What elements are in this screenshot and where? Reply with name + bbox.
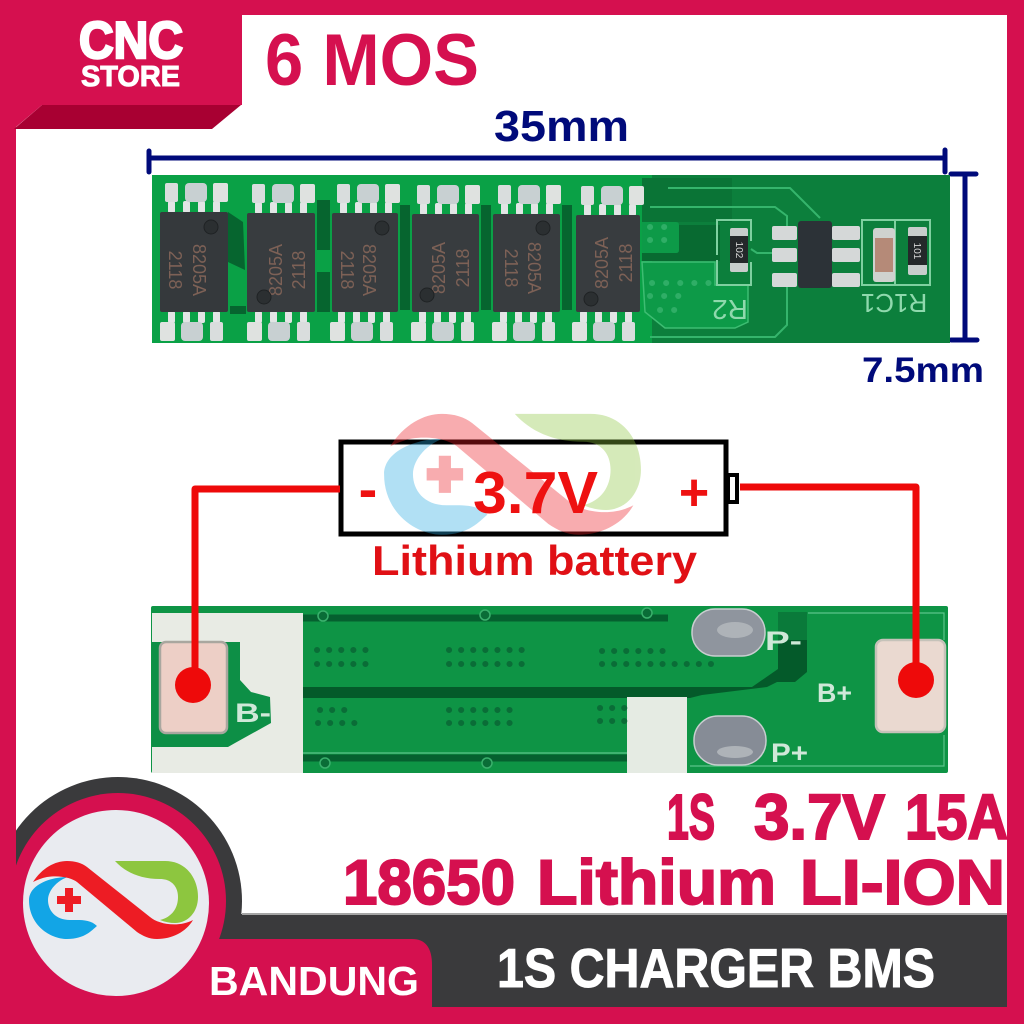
logo panel: CNC Store xyxy=(14,12,242,129)
bottom PCB photo xyxy=(151,606,948,773)
battery voltage: 3.7V xyxy=(473,460,598,526)
dark channels xyxy=(303,640,807,698)
label: B-: B- xyxy=(235,698,271,728)
logo text: CNC: CNC xyxy=(79,12,183,70)
via rows xyxy=(650,227,716,310)
dimension arrow: height xyxy=(951,174,977,340)
spec text: 18650 Lithium LI-ION: LI-ION xyxy=(800,848,1005,918)
dimension label: 35mm: 35mm xyxy=(494,102,629,151)
silkscreen label: R2: R2 xyxy=(712,294,748,325)
chip markings: 2118 xyxy=(616,244,636,282)
spec text: 1S 3.7V 15A: 3.7V xyxy=(754,781,885,853)
white silkscreen area left xyxy=(152,613,303,773)
wire: positive xyxy=(740,487,934,698)
chip markings: 8205A xyxy=(359,244,379,296)
battery label: Lithium battery xyxy=(372,537,698,584)
white patch xyxy=(627,697,687,773)
logo circle xyxy=(23,810,209,996)
battery terminal and text xyxy=(359,457,737,526)
traces xyxy=(650,188,820,337)
logo mark xyxy=(29,861,198,939)
heading: 6 MOS: 6 MOS xyxy=(265,20,479,101)
chip markings: 8205A xyxy=(189,244,209,296)
title: 1S Charger BMS: 1S CHARGER BMS xyxy=(497,937,935,999)
solder pad: P+ xyxy=(694,716,766,765)
dimension label: 7.5mm: 7.5mm xyxy=(862,351,984,390)
pad: B+ xyxy=(876,640,945,732)
spec text: 18650 Lithium LI-ION: 18650 xyxy=(343,848,515,918)
battery outline xyxy=(341,442,726,534)
resistor: 102: 102 xyxy=(733,242,744,259)
bottom bar xyxy=(220,913,1007,1007)
pad: B- xyxy=(160,642,227,733)
pin-one dots xyxy=(204,220,598,306)
battery plus sign: + xyxy=(679,464,709,522)
chip markings: 8205A xyxy=(592,237,612,289)
label: P-: P- xyxy=(765,626,802,656)
wire: negative xyxy=(175,489,340,703)
watermark logo xyxy=(384,414,641,535)
MOSFET chips xyxy=(160,183,644,341)
dark gaps between chips xyxy=(228,178,732,314)
dimension arrow: width xyxy=(149,150,945,172)
edge highlights xyxy=(303,613,944,766)
solder pad: P- xyxy=(692,609,765,656)
chip markings: 2118 xyxy=(289,251,309,289)
silkscreen boxes xyxy=(717,220,930,285)
chip markings: 8205A xyxy=(266,244,286,296)
spec text: 1S 3.7V 15A xyxy=(667,781,1008,853)
silkscreen label: R1C1: R1C1 xyxy=(861,288,927,318)
top PCB photo xyxy=(152,175,950,343)
chip markings xyxy=(165,237,636,296)
logo text: STORE: STORE xyxy=(81,61,180,93)
label: B+: B+ xyxy=(817,678,852,708)
capacitor xyxy=(873,228,895,282)
bright copper area xyxy=(642,262,748,328)
mounting vias xyxy=(318,608,652,768)
spec text: 18650 Lithium LI-ION xyxy=(343,848,1005,918)
chip markings: 8205A xyxy=(429,242,449,294)
chip markings: 2118 xyxy=(165,251,185,289)
label: P+: P+ xyxy=(771,738,808,768)
control IC xyxy=(772,221,860,288)
resistor: 101 xyxy=(908,227,927,275)
label: Bandung: BANDUNG xyxy=(209,958,419,1004)
spec text: 1S 3.7V 15A: 15A xyxy=(905,781,1008,853)
chip markings: 2118 xyxy=(501,249,521,287)
resistor: 102 xyxy=(730,228,748,272)
spec text: 18650 Lithium LI-ION: Lithium xyxy=(537,848,776,918)
badge: round logo and Bandung tab xyxy=(0,770,1024,1024)
resistor: 101: 101 xyxy=(911,243,922,260)
chip markings: 2118 xyxy=(453,249,473,287)
battery minus sign: - xyxy=(359,457,377,520)
chip markings: 2118 xyxy=(337,251,357,289)
spec text: 1S 3.7V 15A: 1S xyxy=(667,781,715,853)
chip markings: 8205A xyxy=(524,242,544,294)
via clusters xyxy=(317,650,716,723)
B- green trace xyxy=(152,642,271,747)
